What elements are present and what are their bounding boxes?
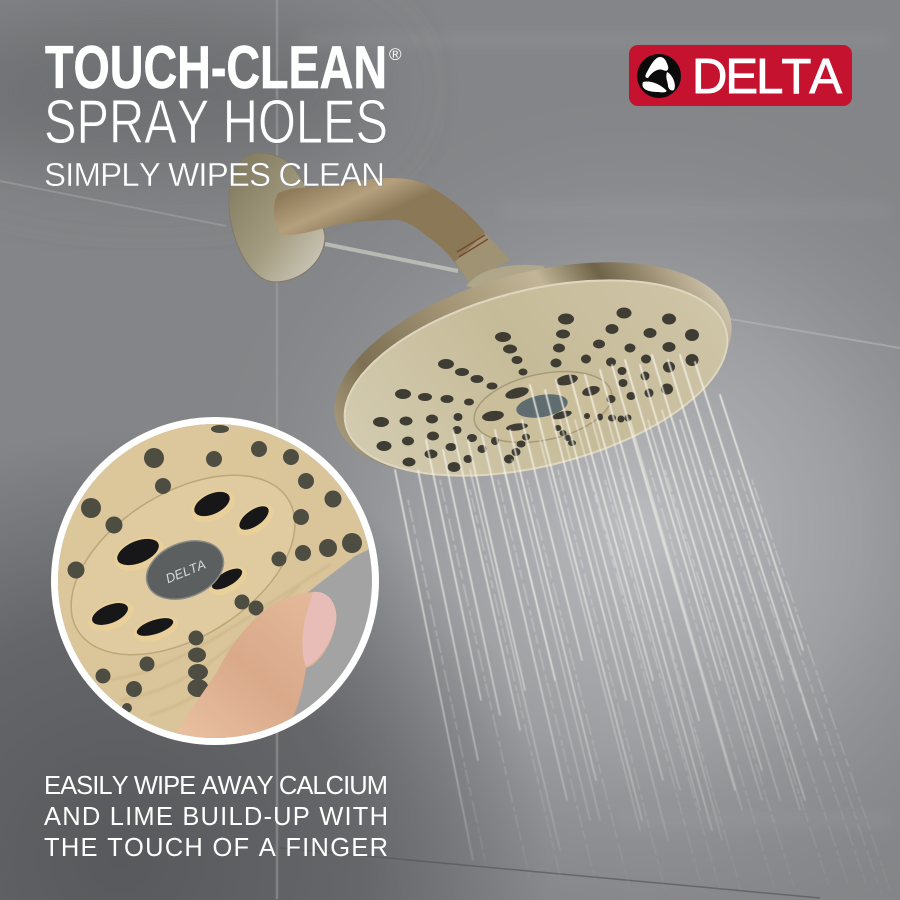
shower arm and wall flange bbox=[229, 153, 510, 284]
caption text: EASILY WIPE AWAY CALCIUM bbox=[44, 772, 388, 800]
neck of shower head bbox=[466, 265, 545, 300]
medallion bbox=[514, 391, 570, 421]
medallion with logo bbox=[146, 540, 224, 600]
plate ridges bbox=[110, 565, 330, 715]
shower head bbox=[311, 223, 755, 515]
spray holes bbox=[373, 308, 699, 472]
beige spray plate bbox=[58, 424, 369, 734]
shower head rim bbox=[311, 223, 755, 515]
logo emblem bbox=[637, 54, 681, 98]
centre ring bbox=[468, 360, 618, 454]
title: Touch-Clean: TOUCH-CLEAN bbox=[45, 34, 387, 101]
title: Touch-Clean: ® bbox=[389, 45, 402, 64]
small spray nozzles bbox=[68, 425, 362, 713]
grey wall behind plate bbox=[50, 415, 380, 745]
medallion with logo: DELTA bbox=[163, 557, 208, 586]
Delta logo badge bbox=[629, 45, 852, 106]
collar rings bbox=[457, 235, 488, 257]
subtitle: SIMPLY WIPES CLEAN bbox=[44, 156, 385, 193]
water spray streams bbox=[395, 355, 890, 895]
shower head face bbox=[325, 245, 747, 511]
inset white border bbox=[51, 417, 379, 745]
caption text: THE TOUCH OF A FINGER bbox=[44, 834, 388, 862]
caption text bbox=[44, 772, 388, 862]
caption text: AND LIME BUILD-UP WITH bbox=[44, 803, 388, 831]
centre raised ring bbox=[70, 474, 296, 656]
large spray slots bbox=[88, 490, 274, 642]
finger bbox=[172, 592, 336, 741]
flange bbox=[229, 153, 325, 282]
inset circle: finger wiping spray holes bbox=[40, 415, 380, 745]
title: Spray Holes: SPRAY HOLES bbox=[44, 88, 388, 157]
fingernail bbox=[302, 592, 336, 667]
arm collar bbox=[455, 233, 510, 284]
arm bbox=[274, 178, 485, 282]
logo wordmark: DELTA bbox=[692, 50, 842, 104]
